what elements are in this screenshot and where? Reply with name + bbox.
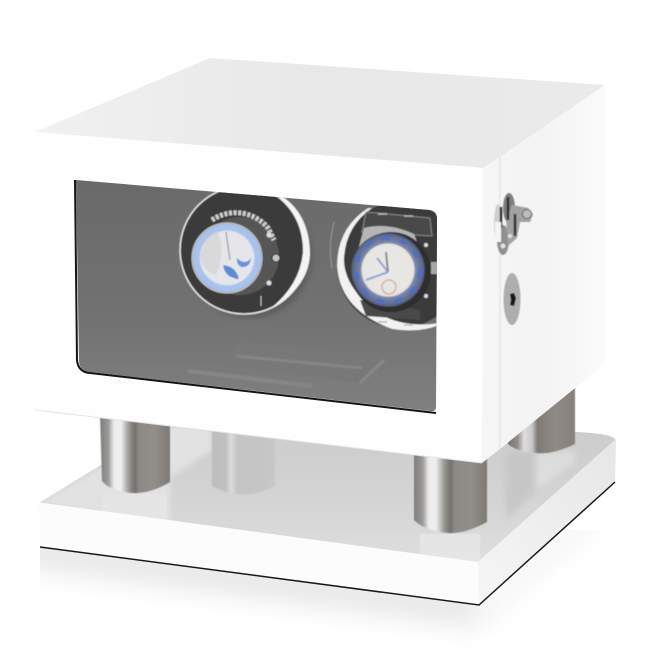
window dark frame edge <box>75 180 436 413</box>
left watch case <box>220 216 279 296</box>
base top surface <box>39 395 615 562</box>
rear centre post reflection <box>212 430 275 494</box>
product illustration: watch winder <box>35 58 616 630</box>
ground reflection <box>40 548 488 630</box>
window <box>75 180 463 413</box>
clasp <box>494 193 533 255</box>
post: rear right <box>508 380 575 453</box>
base side face <box>478 439 616 605</box>
left dial <box>192 223 262 293</box>
right ring <box>339 206 437 326</box>
cabinet front face <box>35 132 483 463</box>
right watch case <box>351 232 431 312</box>
base bottom shadow line <box>40 482 615 605</box>
post: front right <box>414 450 487 533</box>
left ring <box>180 186 308 314</box>
window glass <box>76 180 437 411</box>
lock plate <box>504 273 520 325</box>
cabinet <box>35 58 606 463</box>
left watch winder <box>180 186 312 318</box>
cabinet corner seam <box>499 157 501 449</box>
right dial <box>351 233 425 307</box>
right watch bracelet <box>362 212 432 236</box>
post: front left <box>100 415 170 493</box>
cabinet underside edge <box>35 410 482 463</box>
right watch winder <box>330 206 437 332</box>
left ring shadow <box>222 240 312 319</box>
cabinet side face <box>482 85 606 463</box>
cabinet top face <box>35 58 605 168</box>
base plate <box>39 422 616 606</box>
base front face <box>39 502 479 605</box>
winder tray <box>188 355 384 387</box>
